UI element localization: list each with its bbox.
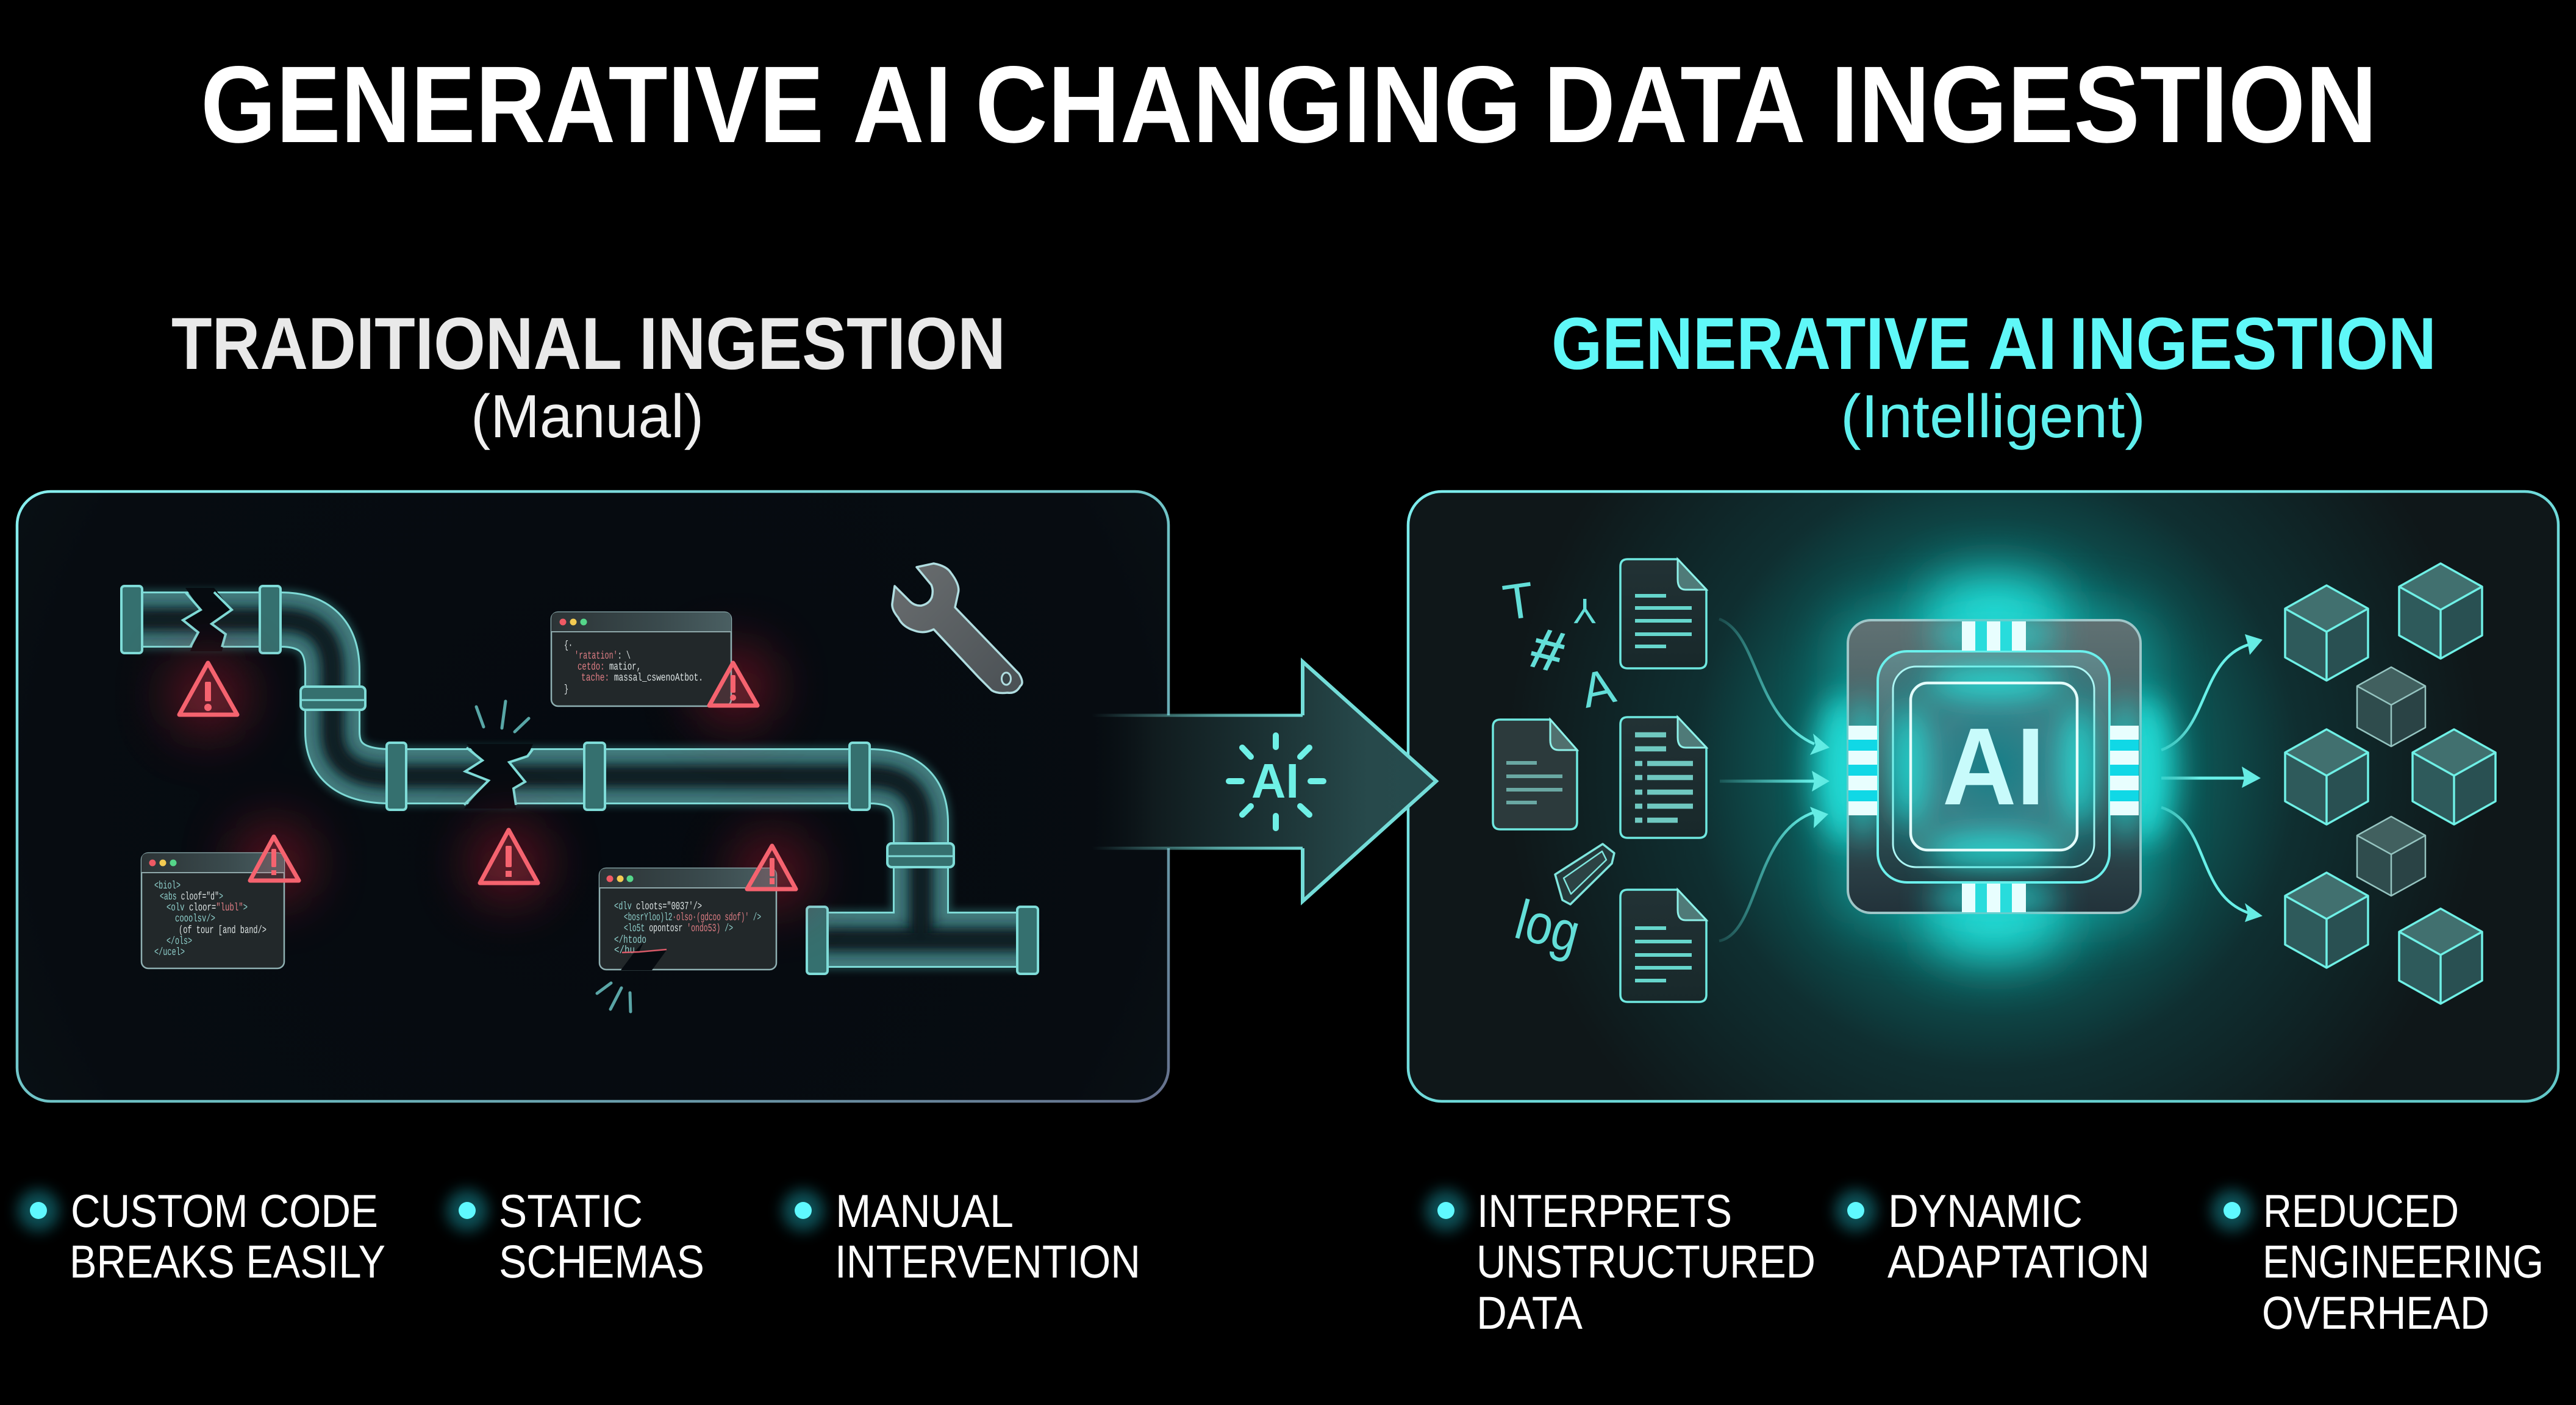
source items: letters: # — [1524, 615, 1572, 686]
title: GENERATIVE — [201, 43, 824, 165]
heading: generative AI ingestion: INGESTION — [2069, 302, 2436, 385]
code window: HTML left: <olv cloor="lubl"> — [166, 902, 248, 914]
warning: right window — [747, 846, 796, 889]
document 1 — [1620, 559, 1706, 668]
code window: JSON config: {· — [564, 640, 573, 652]
code window: JSON config: } — [564, 684, 568, 696]
code window: HTML left: (of tour [and band/> — [179, 924, 267, 937]
code window: HTML left — [141, 853, 284, 968]
heading: traditional ingestion: INGESTION — [639, 302, 1006, 385]
bullet: manual intervention: MANUAL — [835, 1185, 1014, 1237]
chip glow — [1814, 576, 2174, 957]
panel: generative AI ingestion — [1408, 492, 2558, 1101]
label: log: log — [1509, 888, 1586, 965]
bullet: dynamic adaptation — [1835, 1185, 2150, 1288]
code window: HTML right: <bosrYloo)l2·olso·(gdcoo sdof)' /> — [624, 912, 761, 924]
document 3 — [1620, 717, 1706, 838]
source items: letters — [1500, 572, 1620, 718]
title: CHANGING — [975, 43, 1522, 165]
bullet: reduced engineering overhead: OVERHEAD — [2262, 1287, 2489, 1339]
title: DATA — [1544, 43, 1806, 165]
code window: HTML right: <dlv cloots="0037'/> — [614, 901, 702, 913]
heading: traditional ingestion: TRADITIONAL — [171, 302, 622, 385]
heading: generative AI ingestion: GENERATIVE — [1551, 302, 1971, 385]
chip body glow — [1845, 616, 2144, 917]
bullet: static schemas: SCHEMAS — [499, 1236, 704, 1288]
bullet: manual intervention — [782, 1185, 1140, 1288]
warning: config window — [709, 663, 757, 706]
code window: JSON config — [551, 612, 731, 706]
title — [201, 43, 2377, 165]
code window: HTML right: <lo5t opontosr 'ondo53) /> — [624, 923, 733, 935]
heading: traditional ingestion: (Manual) — [471, 382, 704, 451]
code window: HTML left: <biol> — [154, 880, 181, 892]
pins — [1848, 621, 2139, 912]
pipeline with breaks — [121, 586, 1038, 974]
bullet: interprets unstructured data — [1425, 1185, 1816, 1339]
red glows — [170, 648, 809, 909]
heading: generative AI ingestion: AI — [1988, 302, 2057, 385]
bullet: custom code: CUSTOM CODE — [71, 1185, 378, 1237]
bullet: static schemas — [446, 1185, 704, 1288]
code window: HTML left: cooolsv/> — [175, 913, 215, 925]
bullet: reduced engineering overhead — [2211, 1185, 2544, 1339]
code window: HTML right: </hu — [614, 945, 635, 957]
core glow — [1895, 667, 2093, 866]
arrow AI burst: AI — [1251, 754, 1299, 808]
break gap: centre — [464, 744, 533, 809]
document 4 — [1620, 890, 1706, 1002]
bullet: interprets unstructured data: UNSTRUCTURED — [1476, 1236, 1816, 1288]
source items: letters: Y — [1573, 591, 1597, 631]
window crack — [621, 942, 667, 970]
AI chip — [1845, 616, 2144, 917]
warning: top left — [179, 663, 237, 715]
code window: JSON config: tache: massal_cswenoAtbot. — [581, 672, 703, 684]
warning: centre — [480, 830, 538, 883]
source items: letters: T — [1500, 572, 1537, 631]
bullet: reduced engineering overhead: REDUCED — [2263, 1185, 2459, 1237]
code window: HTML right: </htodo — [614, 934, 646, 946]
bullet: interprets unstructured data: DATA — [1476, 1287, 1583, 1339]
document 2 — [1493, 720, 1577, 829]
icon: wrench — [892, 563, 1022, 693]
arrow AI burst — [1229, 735, 1323, 828]
code window: JSON config: 'ratation': \ — [574, 650, 631, 662]
flanges — [121, 586, 1038, 974]
bullet: interprets unstructured data: INTERPRETS — [1477, 1185, 1732, 1237]
title: INGESTION — [1831, 43, 2377, 165]
bullet: static schemas: STATIC — [499, 1185, 643, 1237]
bullet: custom code — [18, 1185, 385, 1288]
code window: JSON config: cetdo: matior, — [578, 661, 641, 673]
arrows into chip — [1719, 619, 1830, 941]
bullet: custom code: BREAKS EASILY — [70, 1236, 385, 1288]
heading: generative AI ingestion — [1551, 302, 2436, 451]
output cubes — [2285, 563, 2496, 1004]
heading: generative AI ingestion: (Intelligent) — [1841, 382, 2145, 451]
arrow: traditional to AI — [1092, 662, 1436, 901]
AI chip: AI — [1942, 706, 2045, 828]
code window: HTML right — [599, 868, 776, 970]
break sparks — [476, 701, 529, 732]
bullet: manual intervention: INTERVENTION — [835, 1236, 1140, 1288]
source items: letters: A — [1576, 658, 1620, 718]
panel: traditional ingestion — [17, 492, 1168, 1101]
warning: left window — [250, 837, 299, 881]
code window: HTML left: </ucel> — [154, 946, 185, 959]
heading: traditional ingestion — [171, 302, 1006, 451]
code window: HTML left: <abs cloof="d"> — [160, 891, 223, 903]
icon: small tilted file — [1555, 844, 1614, 904]
bullet: dynamic adaptation: DYNAMIC — [1888, 1185, 2083, 1237]
break gap: top left — [183, 588, 232, 651]
crack sparks — [597, 983, 631, 1012]
arrows out of chip — [2161, 634, 2263, 922]
code window: HTML left: </ols> — [166, 935, 192, 948]
title: AI — [853, 43, 952, 165]
bullet: dynamic adaptation: ADAPTATION — [1887, 1236, 2150, 1288]
